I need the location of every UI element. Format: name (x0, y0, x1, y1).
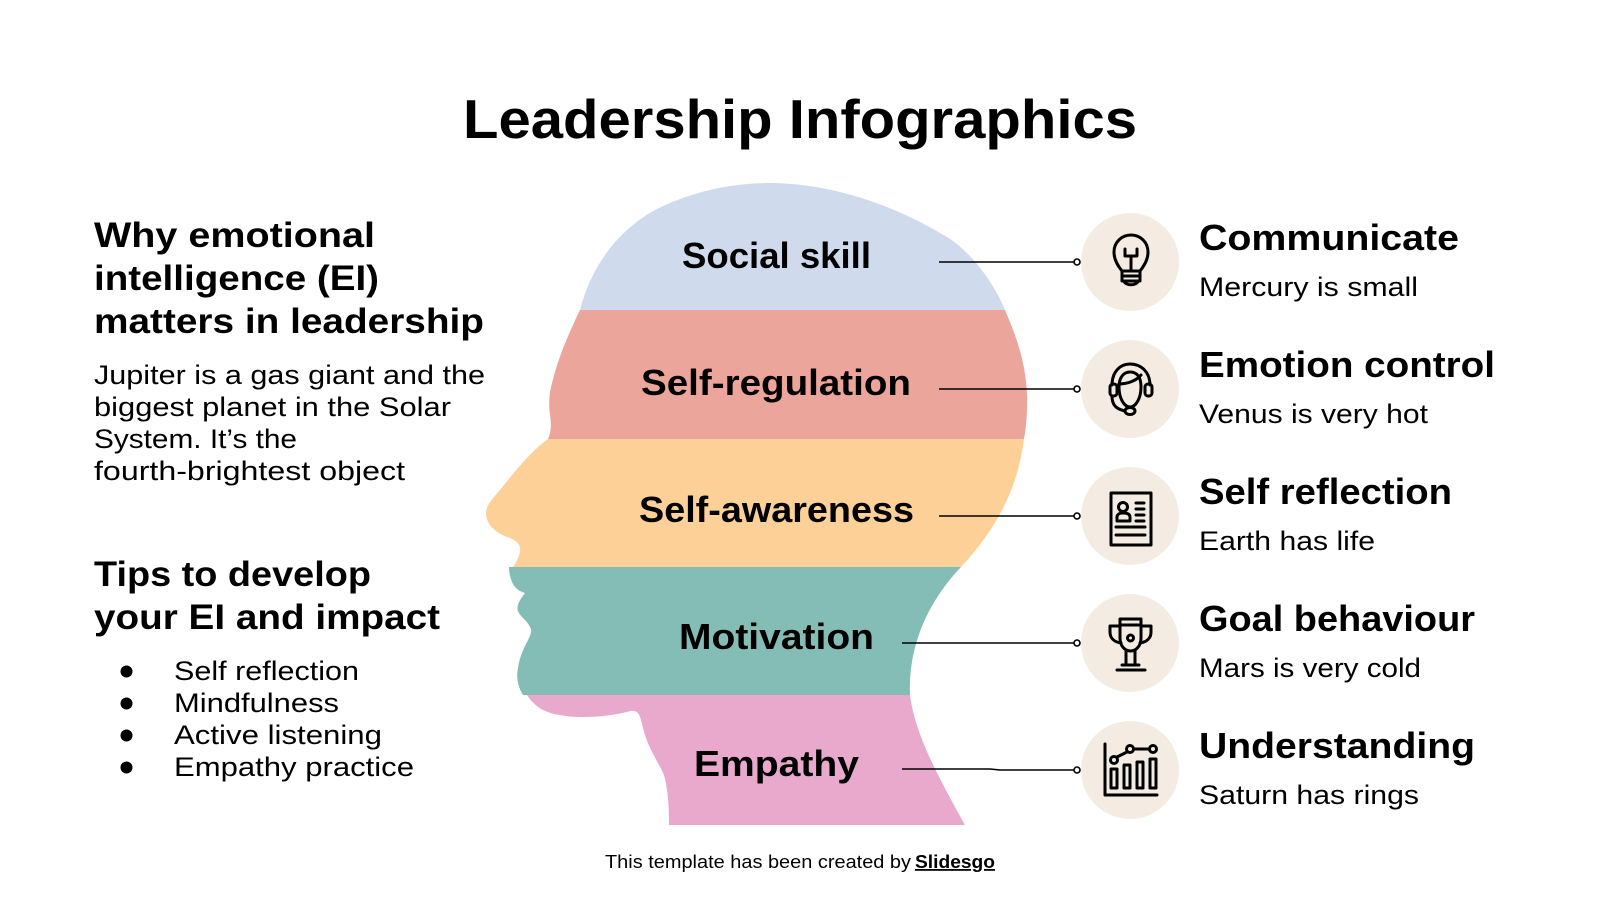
text block: Jupiter description: System. It’s the (94, 424, 297, 454)
text block: Jupiter description (94, 360, 485, 486)
connector: empathy (902, 767, 1080, 773)
band: social skill (580, 183, 1005, 310)
item: understanding: Understanding (1199, 725, 1475, 766)
item: self reflection: Earth has life (1199, 526, 1375, 556)
heading: why emotional intelligence matters (94, 216, 484, 341)
footer credit: This template has been created by (605, 852, 911, 872)
item: emotion control: Emotion control (1199, 344, 1495, 385)
connector: self-regulation (939, 386, 1080, 392)
band: self-regulation (548, 310, 1027, 439)
list: tips: Self reflection (174, 656, 359, 686)
footer credit: Slidesgo (915, 852, 995, 872)
item: self reflection: Self reflection (1199, 471, 1452, 512)
item: understanding: Saturn has rings (1199, 780, 1419, 810)
title: Leadership Infographics (463, 88, 1137, 150)
item: emotion control (1199, 344, 1495, 429)
connector: motivation (902, 640, 1080, 646)
heading: why emotional intelligence matters: Why emotional (94, 216, 375, 255)
item: goal behaviour: Mars is very cold (1199, 653, 1421, 683)
heading: tips to develop: Tips to develop (94, 555, 371, 594)
text block: Jupiter description: Jupiter is a gas giant and the (94, 360, 485, 390)
label: self-awareness: Self-awareness (639, 489, 914, 530)
icon: light bulb (1081, 213, 1179, 311)
connector: social skill (939, 259, 1080, 265)
list: tips: Mindfulness (174, 688, 339, 718)
item: goal behaviour (1199, 598, 1475, 683)
connector: self-awareness (939, 513, 1080, 519)
band: self-awareness (486, 439, 1024, 567)
item: self reflection (1199, 471, 1452, 556)
heading: tips to develop: your EI and impact (94, 598, 440, 637)
list: tips: Empathy practice (174, 752, 414, 782)
icon: trophy (1081, 594, 1179, 692)
list: tips (120, 656, 414, 782)
label: social skill: Social skill (682, 235, 871, 276)
label: motivation: Motivation (679, 616, 874, 657)
icon: profile document (1081, 467, 1179, 565)
item: communicate: Communicate (1199, 217, 1459, 258)
item: communicate: Mercury is small (1199, 272, 1418, 302)
icon: headset (1081, 340, 1179, 438)
icon: bar and line chart (1081, 721, 1179, 819)
label: empathy: Empathy (694, 743, 859, 784)
list: tips: Active listening (174, 720, 382, 750)
label: self-regulation: Self-regulation (641, 362, 911, 403)
heading: why emotional intelligence matters: intelligence (EI) (94, 259, 379, 298)
item: communicate (1199, 217, 1459, 302)
item: emotion control: Venus is very hot (1199, 399, 1429, 429)
text block: Jupiter description: fourth-brightest object (94, 456, 406, 486)
head diagram (486, 183, 1027, 825)
heading: why emotional intelligence matters: matters in leadership (94, 302, 484, 341)
band: empathy (527, 695, 965, 825)
band: motivation (509, 567, 961, 695)
text block: Jupiter description: biggest planet in the Solar (94, 392, 451, 422)
item: goal behaviour: Goal behaviour (1199, 598, 1475, 639)
item: understanding (1199, 725, 1475, 810)
heading: tips to develop (94, 555, 440, 637)
